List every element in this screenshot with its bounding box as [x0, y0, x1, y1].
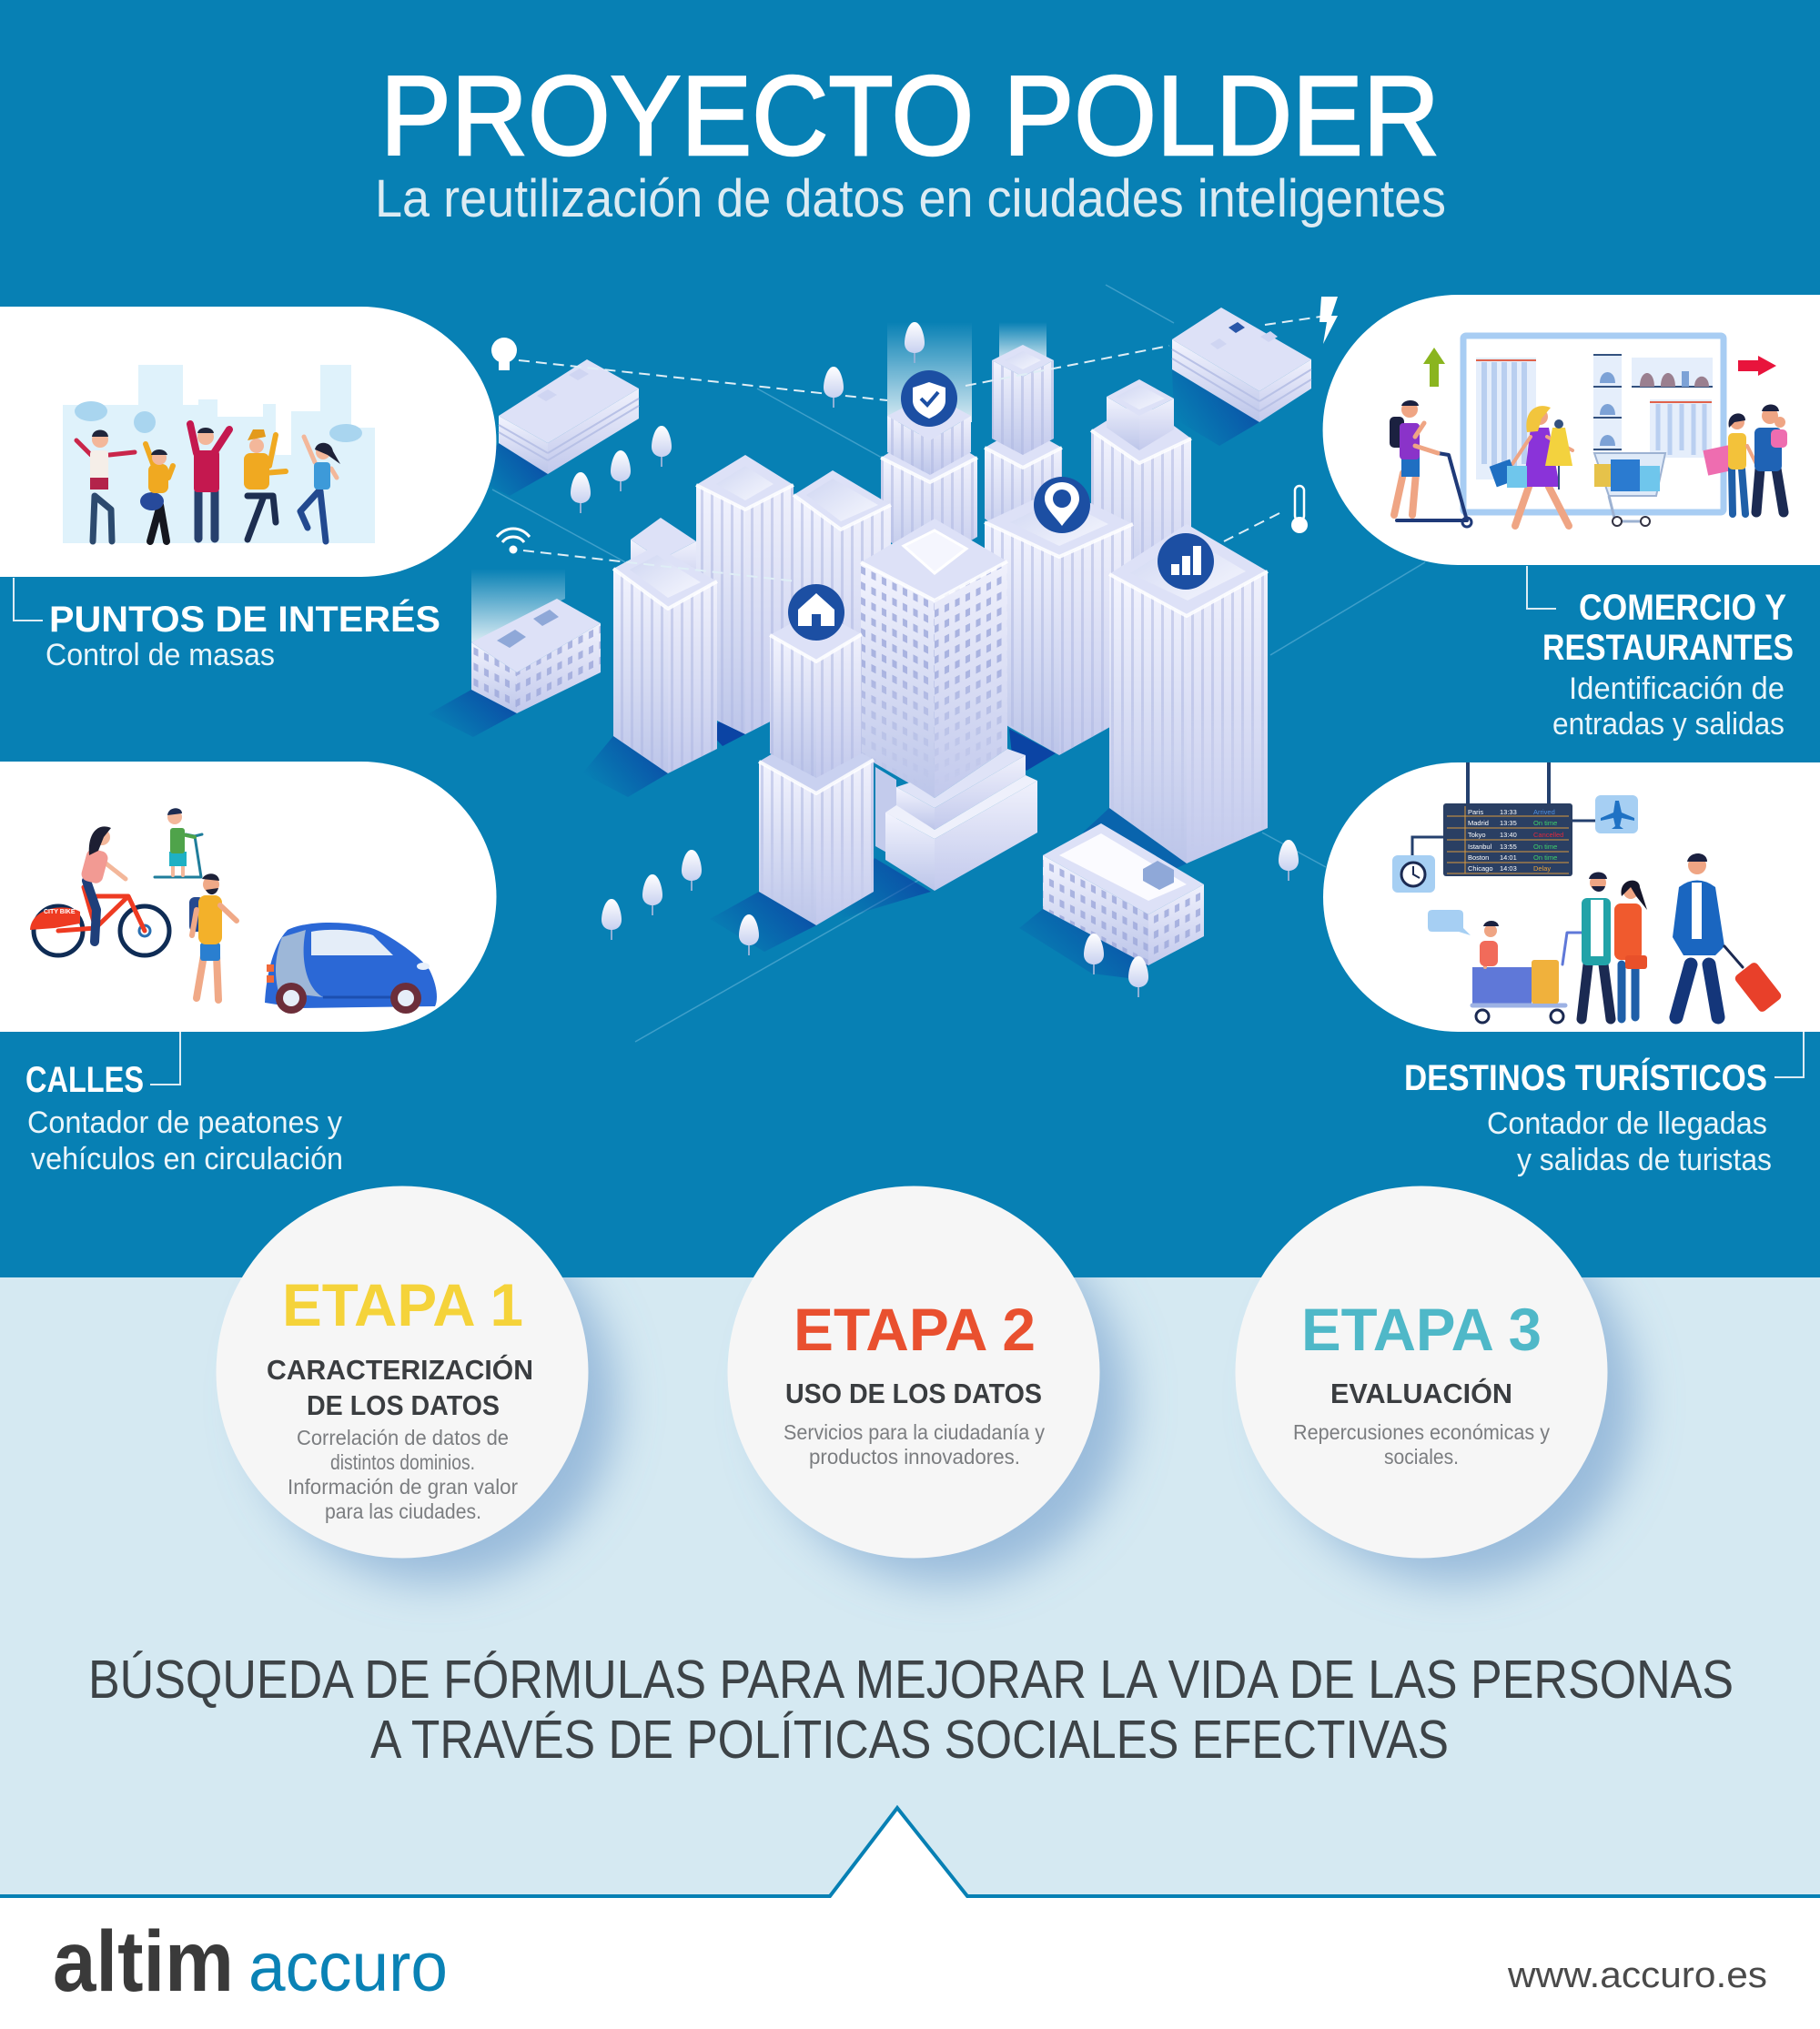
podium upper tier	[896, 749, 1026, 808]
departures board: Boston	[1468, 853, 1489, 862]
departures board: 13:40	[1500, 831, 1517, 839]
tower F	[794, 470, 891, 728]
icon: house	[788, 584, 844, 641]
label: puntos de interés: Control de masas	[46, 638, 275, 672]
website url: www.accuro.es	[1507, 1955, 1767, 1995]
tower E	[696, 455, 794, 734]
departures board: Istanbul	[1468, 843, 1492, 851]
departures board: Delay	[1533, 864, 1551, 873]
panel: etapa 1: para las ciudades.	[325, 1499, 481, 1523]
panel: etapa 2: Servicios para la ciudadanía y	[784, 1420, 1045, 1444]
panel: etapa 1	[217, 1186, 588, 1558]
panel: calles	[0, 762, 497, 1032]
center tower with podium	[861, 519, 1037, 891]
shopping woman	[1490, 406, 1572, 526]
panel: etapa 2: ETAPA 2	[794, 1296, 1036, 1363]
panel: etapa 2: productos innovadores.	[809, 1445, 1020, 1469]
label: comercio y restaurantes: entradas y salidas	[1552, 707, 1785, 742]
departures board: Madrid	[1468, 819, 1489, 827]
right back tower	[1091, 379, 1191, 619]
departures board: Arrived	[1533, 808, 1555, 816]
icon: lightning bolt	[1320, 297, 1338, 344]
label: destinos turísticos: DESTINOS TURÍSTICOS	[1404, 1057, 1767, 1098]
beams of light	[471, 322, 1046, 642]
speech bubble	[1428, 910, 1471, 935]
panel: comercio y restaurantes	[1323, 295, 1820, 565]
label: comercio y restaurantes: Identificación de	[1569, 671, 1785, 706]
panel: etapa 3	[1236, 1186, 1607, 1558]
panel: etapa 3: Repercusiones económicas y	[1293, 1420, 1550, 1444]
logo: altim accuro: altim	[53, 1913, 234, 2010]
cyclist: CITY BIKE	[44, 909, 76, 915]
front tower with house icon	[759, 610, 874, 925]
departures board: Chicago	[1468, 864, 1493, 873]
logo: altim accuro: accuro	[248, 1929, 448, 2006]
podium base	[885, 775, 1037, 839]
connection lines	[519, 317, 1320, 581]
panel: etapa 1: DE LOS DATOS	[307, 1389, 500, 1421]
label: puntos de interés	[14, 578, 440, 672]
shop window	[1463, 336, 1724, 512]
ground shadows	[428, 369, 1259, 978]
icon: thermometer	[1291, 486, 1308, 533]
panel: etapa 1: CARACTERIZACIÓN	[267, 1353, 533, 1386]
label: destinos turísticos	[1404, 1032, 1804, 1177]
trees	[571, 322, 1299, 997]
man on scooter	[1390, 400, 1471, 527]
departures board: Cancelled	[1533, 831, 1563, 839]
logo: altim accuro	[53, 1913, 448, 2010]
departures board: 13:35	[1500, 819, 1517, 827]
departures board: Tokyo	[1468, 831, 1486, 839]
tower right of shield	[985, 345, 1062, 546]
label: calles: Contador de peatones y	[27, 1105, 342, 1140]
departures board: On time	[1533, 853, 1557, 862]
departures board: Paris	[1468, 808, 1483, 816]
flat building top left	[499, 359, 639, 474]
tower behind left: shield tower	[881, 394, 977, 564]
panel: destinos turísticos	[1323, 762, 1820, 1032]
city backdrop	[63, 365, 375, 543]
left tower	[613, 518, 717, 773]
walking man	[189, 873, 237, 1000]
family	[1703, 404, 1787, 514]
departures board: On time	[1533, 843, 1557, 851]
isometric smart city illustration	[428, 285, 1425, 1042]
closing statement: A TRAVÉS DE POLÍTICAS SOCIALES EFECTIVAS	[370, 1710, 1449, 1770]
label: comercio y restaurantes: COMERCIO Y	[1579, 588, 1786, 628]
circle shadows	[253, 1219, 1636, 1583]
label: calles: vehículos en circulación	[31, 1142, 343, 1176]
flat building top right	[1172, 308, 1311, 422]
icon: wifi	[497, 529, 530, 552]
cyclist	[30, 826, 169, 955]
plane sign	[1572, 795, 1638, 833]
label: calles: CALLES	[25, 1060, 144, 1100]
blue car	[265, 923, 437, 1014]
icon: shield	[901, 370, 957, 427]
mannequin	[1545, 419, 1572, 490]
departures board: 14:03	[1500, 864, 1517, 873]
light band background	[0, 1277, 1820, 1896]
white footer background	[0, 1896, 1820, 2029]
clock sign	[1392, 837, 1443, 893]
panel: etapa 1: Información de gran valor	[288, 1475, 518, 1499]
icon: light bulb	[491, 338, 517, 370]
label: calles	[25, 1032, 343, 1176]
crowd of people	[76, 424, 340, 541]
departures board: 14:01	[1500, 853, 1517, 862]
family with luggage	[1472, 872, 1647, 1023]
label: comercio y restaurantes	[1527, 566, 1794, 742]
label: destinos turísticos: y salidas de turistas	[1517, 1143, 1772, 1177]
label: destinos turísticos: Contador de llegadas	[1487, 1106, 1767, 1141]
departures board	[1443, 762, 1572, 876]
icon: location pin	[1034, 477, 1090, 533]
panel: etapa 3: EVALUACIÓN	[1330, 1377, 1512, 1409]
child on scooter	[155, 808, 202, 877]
big right tower	[1109, 524, 1268, 863]
arrows	[1423, 348, 1776, 387]
speech bubbles	[75, 401, 362, 442]
blue background	[0, 0, 1820, 1277]
low building bottom right	[1043, 823, 1204, 965]
panel: etapa 1: Correlación de datos de	[297, 1426, 509, 1449]
panel: etapa 1: ETAPA 1	[282, 1271, 523, 1338]
shopping cart	[1594, 453, 1665, 526]
label: puntos de interés: PUNTOS DE INTERÉS	[49, 599, 440, 640]
panel: puntos de interés	[0, 307, 496, 577]
traveller with red suitcase	[1673, 853, 1783, 1017]
panel: etapa 3: ETAPA 3	[1301, 1296, 1542, 1363]
panel: etapa 3: sociales.	[1384, 1445, 1459, 1469]
departures board: 13:55	[1500, 843, 1517, 851]
panel: etapa 2: USO DE LOS DATOS	[785, 1378, 1042, 1409]
low building left	[471, 599, 601, 713]
closing statement	[88, 1650, 1734, 1770]
subtitle: La reutilización de datos en ciudades inteligentes	[375, 169, 1446, 228]
icon: bar chart	[1158, 533, 1214, 590]
departures board: 13:33	[1500, 808, 1517, 816]
panel: etapa 2	[728, 1186, 1099, 1558]
title: PROYECTO POLDER	[380, 54, 1440, 179]
panel: etapa 1: distintos dominios.	[330, 1450, 475, 1474]
pin tower	[985, 488, 1133, 755]
footer divider with triangle	[0, 1808, 1820, 1902]
departures board: On time	[1533, 819, 1557, 827]
